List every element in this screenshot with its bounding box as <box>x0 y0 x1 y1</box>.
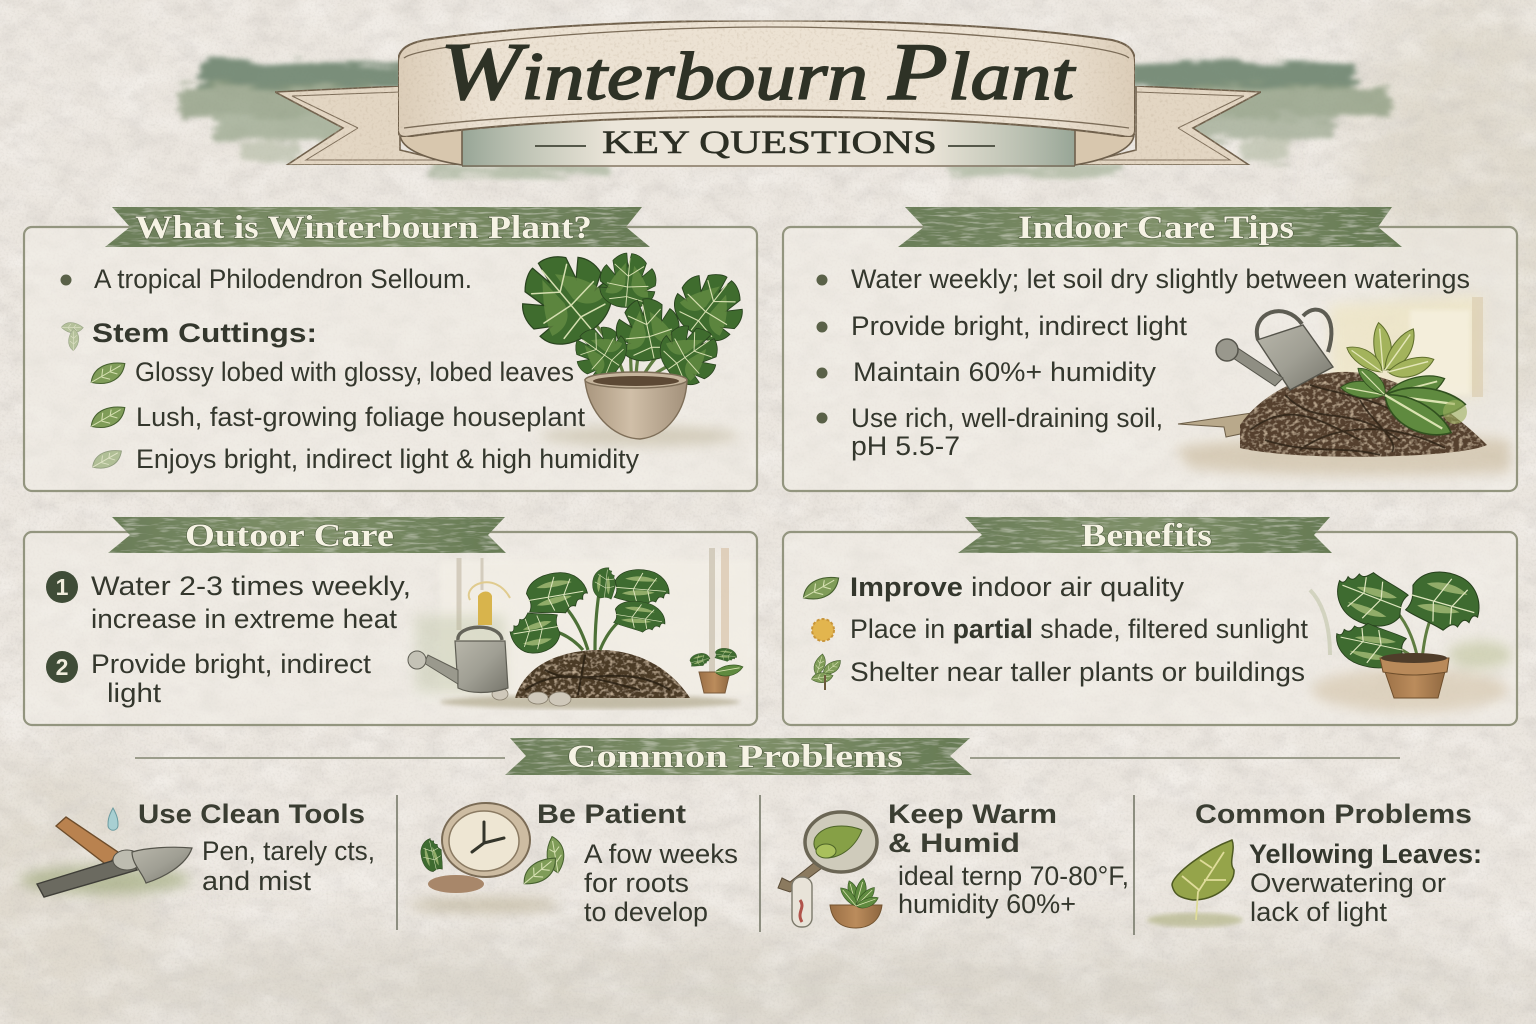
heading ribbon: Benefits <box>1081 518 1212 554</box>
small pot <box>699 672 730 693</box>
heading ribbon <box>958 517 1332 554</box>
illustration: potted monstera <box>503 236 757 446</box>
benefit text: Shelter near taller plants or buildings <box>850 657 1305 687</box>
tips list: pH 5.5-7 <box>851 431 960 461</box>
icon: water drop <box>108 808 118 830</box>
tips list: Maintain 60%+ humidity <box>853 357 1157 387</box>
heading ribbon: What is Winterbourn Plant? <box>135 210 592 246</box>
heading ribbon <box>105 207 650 247</box>
heading ribbon: Outoor Care <box>185 518 394 554</box>
item text: Glossy lobed with glossy, lobed leaves <box>135 357 574 387</box>
step 2 text: light <box>107 678 162 708</box>
body text <box>584 839 738 927</box>
subtitle: KEY QUESTIONS <box>602 125 937 161</box>
illustration: watering can and soil mound <box>1175 310 1510 475</box>
body text <box>1249 839 1482 927</box>
tips list: Water weekly; let soil dry slightly between waterings <box>851 264 1470 294</box>
section: common problems heading: Common Problems <box>567 739 903 775</box>
heading: Keep Warm <box>888 799 1057 829</box>
tips list: Use rich, well-draining soil, <box>851 403 1163 433</box>
subtitle band <box>462 112 1075 167</box>
icon: small plant <box>809 654 842 690</box>
icon: leaf <box>803 577 839 599</box>
step 2 text: Provide bright, indirect <box>91 649 372 679</box>
icon: trowel <box>20 817 192 897</box>
divider <box>396 795 398 930</box>
divider <box>759 795 761 932</box>
sub heading: Stem Cuttings: <box>92 318 317 348</box>
body text: lack of light <box>1250 897 1387 927</box>
icon: sprig <box>61 318 83 351</box>
body text <box>898 861 1129 919</box>
icon: yellowing leaf <box>1147 840 1243 927</box>
icon: leaf <box>91 363 125 383</box>
step 1 text <box>91 571 411 634</box>
green watercolor brush behind banner <box>180 62 1390 176</box>
title text: Winterbourn Plant <box>440 26 1076 117</box>
icon: sun <box>812 619 834 641</box>
body text: Pen, tarely cts, <box>202 836 375 866</box>
heading: Use Clean Tools <box>138 799 365 829</box>
bullet <box>60 274 72 286</box>
step 1 number: 1 <box>56 574 69 600</box>
heading: Common Problems <box>1195 799 1472 829</box>
benefit text: Improve indoor air quality <box>850 572 1185 602</box>
item text: Lush, fast-growing foliage houseplant <box>136 402 585 432</box>
body text: for roots <box>584 868 689 898</box>
icon: pale leaf <box>93 451 121 468</box>
heading: Be Patient <box>537 799 686 829</box>
body text: ideal ternp 70-80°F, <box>898 861 1129 891</box>
body text <box>202 836 375 896</box>
main ribbon <box>398 20 1135 137</box>
body text: humidity 60%+ <box>898 889 1076 919</box>
column: common problems <box>1147 799 1482 927</box>
step 1 text: increase in extreme heat <box>91 604 398 634</box>
body text: to develop <box>584 897 708 927</box>
benefit text: Place in partial shade, filtered sunlight <box>850 614 1308 644</box>
tips list: Provide bright, indirect light <box>851 311 1188 341</box>
body text: A fow weeks <box>584 839 738 869</box>
body text: Overwatering or <box>1250 868 1446 898</box>
step 2 number <box>46 651 78 683</box>
can <box>455 641 508 692</box>
step 1 text: Water 2-3 times weekly, <box>91 571 411 601</box>
step 2 number: 2 <box>56 654 68 680</box>
illustration: warm window light <box>1330 295 1483 397</box>
icon: clock with plants <box>410 803 570 913</box>
ribbon inner border <box>404 27 1129 128</box>
divider <box>1133 795 1135 935</box>
body text: Yellowing Leaves: <box>1249 839 1482 869</box>
step 2 text <box>91 649 372 708</box>
title banner <box>275 20 1261 167</box>
corn <box>478 592 492 625</box>
illustration: potted plant <box>1310 561 1512 712</box>
right ribbon tail <box>1075 86 1261 165</box>
tips list <box>816 264 1470 461</box>
heading ribbon: Indoor Care Tips <box>1018 210 1294 246</box>
column: be patient <box>410 799 738 927</box>
left ribbon tail <box>275 86 462 165</box>
column: keep warm and humid <box>778 799 1129 928</box>
icon: magnifier, thermometer and potted plant <box>778 812 882 928</box>
heading <box>888 799 1057 858</box>
heading ribbon <box>108 517 506 554</box>
panel: what is winterbourn plant <box>24 207 757 491</box>
illustration: garden scene <box>408 548 752 709</box>
section: common problems heading <box>135 738 1400 775</box>
ribbon folds <box>400 128 1134 165</box>
heading ribbon <box>898 207 1402 247</box>
panel: benefits <box>783 517 1517 725</box>
heading: & Humid <box>888 828 1020 858</box>
step 1 number <box>46 571 78 603</box>
intro text: A tropical Philodendron Selloum. <box>94 264 472 294</box>
item text: Enjoys bright, indirect light & high humidity <box>136 444 639 474</box>
column: use clean tools <box>20 799 375 897</box>
panel: indoor care tips <box>783 207 1517 491</box>
panel: outdoor care <box>24 517 757 725</box>
body text: and mist <box>202 866 312 896</box>
icon: dark leaf <box>91 407 125 427</box>
